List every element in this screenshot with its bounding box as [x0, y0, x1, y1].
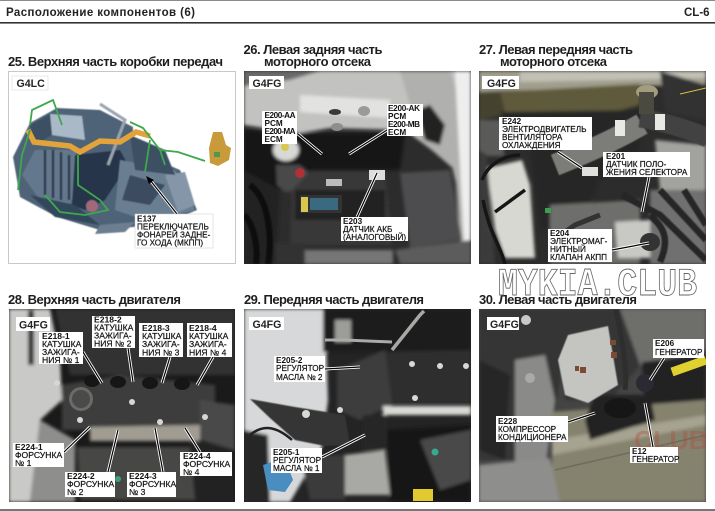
label E224-2: ФОРСУНКА	[67, 479, 114, 489]
label E218-1: E218-1	[42, 331, 70, 341]
label E218-3: ЗАЖИГА-	[142, 339, 180, 349]
label E224-3: E224-3	[129, 471, 157, 481]
label E228: КОМПРЕССОР	[498, 425, 557, 434]
label E203: ДАТЧИК АКБ	[343, 225, 392, 234]
arrow E137	[146, 176, 177, 214]
label E137: ФОНАРЕЙ ЗАДНЕ-	[137, 228, 211, 240]
label E224-2	[65, 471, 115, 497]
label E205-2: МАСЛА № 2	[276, 373, 323, 382]
panel 30: engine left side	[479, 309, 708, 502]
label E201: ДАТЧИК ПОЛО-	[606, 160, 667, 169]
arrow E206	[650, 358, 664, 380]
label E218-1: КАТУШКА	[42, 339, 82, 349]
label E218-1	[39, 331, 83, 365]
label E224-2: E224-2	[67, 471, 95, 481]
label E200-AA: E200-MA	[264, 127, 296, 136]
arrow E201	[642, 177, 649, 212]
arrow E242	[558, 152, 582, 168]
label E200-AK: E200-AK	[388, 104, 420, 113]
label E200-AA	[262, 111, 297, 144]
label E206: ГЕНЕРАТОР	[655, 348, 703, 357]
label E242: ВЕНТИЛЯТОРА	[502, 133, 563, 142]
label E218-4: ЗАЖИГА-	[189, 339, 227, 349]
label E224-1: № 1	[15, 458, 32, 468]
label E228: КОНДИЦИОНЕРА	[498, 433, 567, 442]
label E224-3: ФОРСУНКА	[129, 479, 176, 489]
label E218-4: КАТУШКА	[189, 331, 229, 341]
arrow E228	[568, 413, 595, 422]
label E12: ГЕНЕРАТОР	[632, 455, 680, 464]
label E218-3: НИЯ № 3	[142, 348, 180, 358]
label E242: ЭЛЕКТРОДВИГАТЕЛЬ	[502, 125, 586, 134]
label E224-3: № 3	[129, 487, 146, 497]
label E205-1	[271, 448, 322, 473]
label E218-4: НИЯ № 4	[189, 348, 227, 358]
label E137: E137	[137, 214, 157, 224]
panel 27: front engine bay	[479, 71, 708, 264]
label E224-1	[13, 442, 64, 468]
heading 27	[479, 42, 633, 69]
engine illustration	[13, 100, 231, 234]
arrow E203	[357, 173, 377, 217]
label E224-4: № 4	[183, 467, 200, 477]
label E218-2: НИЯ № 2	[94, 338, 132, 348]
label E228: E228	[498, 417, 518, 426]
label E218-1: ЗАЖИГА-	[42, 347, 80, 357]
label E224-4: E224-4	[183, 451, 211, 461]
label E218-2	[92, 314, 135, 348]
label E137: ГО ХОДА (МКПП)	[137, 238, 203, 248]
label E242: ОХЛАЖДЕНИЯ	[502, 141, 561, 150]
label E137	[135, 214, 213, 248]
heading 26: 26. Левая задняя часть	[244, 42, 382, 57]
label E224-4	[180, 451, 232, 477]
label E204: НИТНЫЙ	[550, 243, 586, 254]
label E224-3	[127, 471, 176, 497]
label E204: E204	[550, 229, 570, 238]
label E218-2: ЗАЖИГА-	[94, 330, 132, 340]
panel 29: engine front	[244, 309, 471, 502]
heading 27: моторного отсека	[500, 54, 608, 69]
badge G4FG: G4FG	[490, 319, 519, 331]
arrow E200-AK	[349, 130, 387, 154]
label E218-2: КАТУШКА	[94, 322, 134, 332]
label E205-2: E205-2	[276, 356, 303, 365]
label E224-4: ФОРСУНКА	[183, 459, 230, 469]
label E205-1: МАСЛА № 1	[273, 464, 320, 473]
label E204	[548, 229, 612, 262]
label E224-2: № 2	[67, 487, 84, 497]
label E203: (АНАЛОГОВЫЙ)	[343, 231, 406, 242]
label E200-AA: E200-AA	[264, 111, 296, 120]
badge G4FG	[482, 76, 519, 90]
label E218-3	[139, 323, 183, 358]
label E200-AK: E200-MB	[388, 120, 420, 129]
badge G4FG: G4FG	[19, 320, 48, 332]
label E218-3: E218-3	[142, 323, 170, 333]
label E205-2: РЕГУЛЯТОР	[276, 364, 325, 373]
arrows to coils and injectors	[64, 348, 213, 472]
label E203	[341, 217, 408, 242]
arrow E205-1	[322, 435, 365, 457]
label E200-AK: PCM	[388, 112, 406, 121]
label E200-AK	[387, 104, 423, 137]
label E218-3: КАТУШКА	[142, 331, 182, 341]
arrow E205-2	[325, 367, 360, 369]
label E224-1: E224-1	[15, 442, 43, 452]
heading 26: моторного отсека	[264, 54, 372, 69]
label E137: ПЕРЕКЛЮЧАТЕЛЬ	[137, 222, 209, 232]
label E218-1: НИЯ № 1	[42, 355, 80, 365]
panel 25: transmission top	[8, 72, 236, 264]
label E242: E242	[502, 117, 522, 126]
label E12: E12	[632, 447, 647, 456]
badge G4FG: G4FG	[252, 319, 281, 331]
heading 26	[244, 42, 382, 69]
badge G4FG: G4FG	[252, 78, 281, 90]
label E200-AK: ECM	[388, 128, 406, 137]
heading 27: 27. Левая передняя часть	[479, 42, 633, 57]
badge G4LC	[12, 76, 48, 90]
label E242	[499, 117, 592, 150]
label E204: ЭЛЕКТРОМАГ-	[550, 237, 608, 246]
heading 28: 28. Верхняя часть двигателя	[8, 292, 181, 307]
label E204: КЛАПАН АКПП	[550, 253, 607, 262]
label E205-2	[274, 356, 325, 382]
label E218-2: E218-2	[94, 314, 122, 324]
label E224-1: ФОРСУНКА	[15, 450, 62, 460]
label E206: E206	[655, 339, 675, 348]
panel 26: rear engine bay	[244, 71, 471, 264]
label E200-AA: PCM	[264, 119, 283, 128]
label E201	[603, 152, 690, 177]
page code: CL-6	[684, 7, 710, 19]
label E218-4	[187, 323, 232, 358]
badge G4FG: G4FG	[487, 78, 516, 90]
badge G4LC: G4LC	[16, 78, 45, 90]
label E206	[653, 339, 704, 358]
arrow E200-AA	[298, 134, 322, 154]
page title: Расположение компонентов (6)	[6, 7, 195, 19]
label E205-1: РЕГУЛЯТОР	[273, 456, 322, 465]
arrow E12	[645, 403, 653, 447]
heading 29: 29. Передняя часть двигателя	[244, 292, 424, 307]
label E203: E203	[343, 217, 363, 226]
label E12	[630, 447, 680, 464]
label E218-4: E218-4	[189, 323, 217, 333]
arrow E204	[612, 243, 649, 250]
panel 28: engine top	[8, 309, 236, 502]
label E201: E201	[606, 152, 626, 161]
heading 25: 25. Верхняя часть коробки передач	[8, 54, 223, 69]
heading 30: 30. Левая часть двигателя	[479, 292, 637, 307]
label E205-1: E205-1	[273, 448, 300, 457]
label E228	[496, 416, 568, 442]
label E200-AA: ECM	[264, 135, 283, 144]
label E201: ЖЕНИЯ СЕЛЕКТОРА	[606, 168, 688, 177]
faint red watermark: CLUB	[634, 425, 708, 455]
